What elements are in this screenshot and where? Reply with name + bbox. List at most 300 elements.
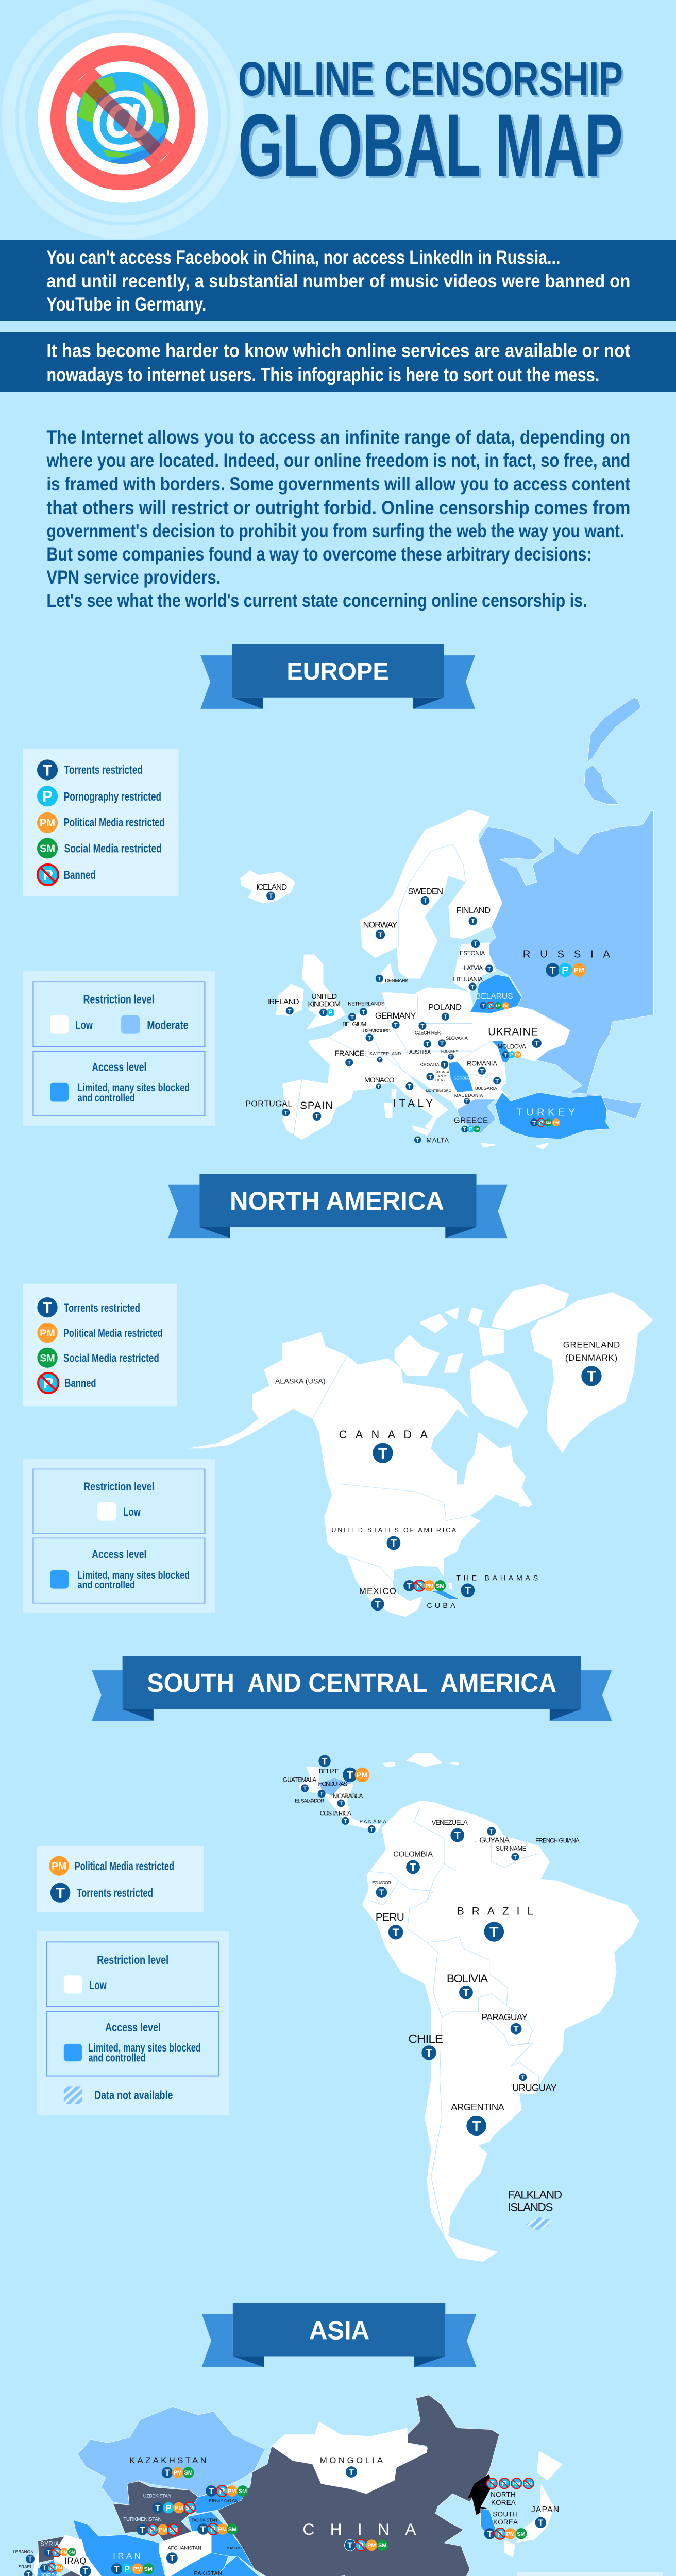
Tajikistan: PM	[218, 2527, 227, 2533]
Luxembourg: T	[368, 1035, 371, 1041]
Ireland	[267, 997, 299, 1014]
Cuba: CUBA	[427, 1602, 455, 1610]
Turkey	[516, 1107, 575, 1126]
legend item: social media: SM	[40, 843, 55, 855]
title	[238, 52, 626, 197]
Uzbekistan	[143, 2494, 195, 2513]
access level box: and controlled	[78, 1580, 135, 1591]
Turkmenistan: PM	[159, 2527, 167, 2533]
Slovakia	[438, 1036, 468, 1047]
Greece	[454, 1116, 488, 1132]
Ecuador: T	[379, 1888, 384, 1897]
restriction level box: Low	[75, 1018, 93, 1031]
Hungary: HUNGARY	[441, 1050, 458, 1054]
Iceland: ICELAND	[256, 883, 287, 892]
Japan	[531, 2505, 559, 2528]
Ecuador: ECUADOR	[372, 1880, 391, 1885]
ribbon heading: Asia: ASIA	[309, 2316, 369, 2345]
Belgium: BELGIUM	[342, 1021, 366, 1028]
Iraq: IRAQ	[65, 2556, 86, 2566]
The Bahamas: THE BAHAMAS	[456, 1574, 538, 1583]
access level box: Access level	[92, 1548, 146, 1561]
Bolivia: T	[463, 1988, 469, 1999]
access level box: and controlled	[78, 1092, 135, 1104]
legend item: banned: P	[43, 867, 53, 884]
Mexico: MEXICO	[359, 1586, 396, 1596]
Russia: T	[550, 965, 556, 976]
Belarus: SM	[495, 1004, 501, 1008]
ribbon heading: North America: NORTH AMERICA	[230, 1187, 444, 1215]
Luxembourg: LUXEMBOURG	[360, 1028, 391, 1033]
Sweden: T	[423, 897, 427, 905]
Falkland Islands	[508, 2189, 562, 2213]
Paraguay: PARAGUAY	[482, 2012, 528, 2022]
legend item: banned: P	[43, 1375, 54, 1392]
Iran: T	[114, 2565, 120, 2574]
section: South and Central America	[37, 1656, 639, 2262]
access level box: Limited, many sites blocked	[89, 2041, 201, 2054]
Lebanon: LEBANON	[13, 2549, 33, 2554]
Ukraine: T	[534, 1040, 539, 1047]
Cuba: T	[407, 1582, 412, 1591]
Tajikistan: TADJIKISTAN	[191, 2517, 217, 2522]
The Bahamas	[456, 1574, 538, 1597]
Colombia: COLOMBIA	[393, 1850, 433, 1858]
France: FRANCE	[334, 1049, 365, 1058]
Lithuania	[453, 976, 483, 990]
Japan: T	[538, 2518, 543, 2528]
South America legend: icons	[37, 1846, 204, 1912]
Poland: T	[444, 1014, 447, 1020]
access level box	[46, 2011, 218, 2076]
Kazakhstan: T	[165, 2468, 170, 2478]
Spain	[300, 1100, 333, 1121]
Honduras: HONDURAS	[318, 1781, 348, 1787]
restriction level box: Low	[123, 1505, 141, 1518]
restriction level box: Restriction level	[97, 1953, 168, 1967]
legend item: political media: Political Media restricted	[64, 816, 165, 829]
South Korea: T	[487, 2530, 493, 2539]
Bulgaria	[475, 1077, 501, 1091]
North Korea: PM	[513, 2481, 520, 2487]
Uzbekistan: T	[155, 2503, 160, 2513]
Colombia: T	[410, 1862, 416, 1873]
Moldova: PM	[515, 1053, 520, 1057]
Turkey: P	[539, 1120, 543, 1126]
ribbon heading: Europe: EUROPE	[286, 658, 389, 685]
Afghanistan: AFGHANISTAN	[167, 2546, 201, 2551]
Turkey: SM	[546, 1120, 551, 1125]
Tajikistan: SM	[228, 2527, 236, 2533]
Croatia	[420, 1061, 448, 1069]
Ukraine: UKRAINE	[488, 1026, 538, 1038]
Iran: PM	[133, 2566, 142, 2572]
China: P	[358, 2541, 364, 2550]
Paraguay: T	[514, 2025, 519, 2034]
Kyrgyzstan: P	[219, 2487, 225, 2496]
Panama: T	[370, 1827, 374, 1833]
Netherlands	[348, 1002, 385, 1015]
El Salvador	[295, 1790, 326, 1804]
legend item: political media: PM	[40, 818, 55, 829]
legend item: pornography: Pornography restricted	[64, 790, 161, 803]
intro body text: VPN service providers.	[46, 567, 221, 588]
Finland	[456, 905, 491, 925]
legend item: torrents: Torrents restricted	[64, 1301, 140, 1314]
intro body text	[46, 427, 630, 611]
France	[334, 1049, 365, 1066]
Romania: ROMANIA	[467, 1060, 497, 1067]
Czech Republic: T	[421, 1023, 425, 1029]
Mexico: T	[375, 1599, 381, 1609]
legend item: pornography: P	[42, 788, 53, 805]
South Korea: P	[497, 2530, 503, 2539]
Spain: T	[315, 1113, 319, 1120]
China	[302, 2520, 416, 2551]
Moldova	[498, 1043, 526, 1058]
Kazakhstan: SM	[184, 2470, 193, 2476]
Greece: GREECE	[454, 1116, 488, 1125]
legend item: banned: Banned	[64, 868, 96, 882]
Portugal: PORTUGAL	[245, 1099, 292, 1108]
legend item: torrents: T	[43, 762, 53, 779]
access level box	[33, 1052, 205, 1116]
legend item: banned	[38, 865, 96, 885]
Alaska: ALASKA (USA)	[275, 1378, 326, 1386]
Bosnia and Herzegovina	[426, 1071, 449, 1082]
Kazakhstan: KAZAKHSTAN	[129, 2455, 207, 2465]
North America legend: levels	[23, 1459, 215, 1613]
restriction level box	[33, 1469, 205, 1534]
Jordan: T	[42, 2565, 46, 2572]
Italy	[393, 1082, 433, 1110]
legend item: banned	[38, 1373, 96, 1393]
Tajikistan	[191, 2517, 238, 2535]
Russia: RUSSIA	[523, 949, 611, 960]
Cuba: P	[417, 1582, 422, 1591]
legend item: torrents: Torrents restricted	[64, 763, 143, 776]
access level box: Limited, many sites blocked	[78, 1082, 190, 1094]
Malta: MALTA	[426, 1137, 449, 1144]
data not available	[64, 2086, 173, 2104]
Greenland: (DENMARK)	[565, 1353, 617, 1363]
Cuba	[403, 1580, 455, 1610]
Cuba: SM	[436, 1583, 444, 1589]
data not available: Data not available	[94, 2089, 173, 2102]
Croatia: CROATIA	[420, 1062, 440, 1067]
map: Europe	[240, 698, 653, 1149]
Russia: PM	[574, 967, 584, 974]
Asia legend: icons	[517, 2572, 663, 2576]
North Korea	[487, 2478, 534, 2506]
United Kingdom	[308, 992, 341, 1016]
Venezuela	[432, 1819, 468, 1842]
legend item: political media: Political Media restricted	[63, 1327, 162, 1340]
United Kingdom: UNITED	[311, 992, 337, 1001]
Macedonia: MACEDONIA	[454, 1093, 483, 1098]
Poland	[428, 1002, 462, 1021]
Hungary	[441, 1050, 458, 1060]
United Kingdom: P	[329, 1010, 333, 1016]
legend item: political media	[49, 1856, 174, 1876]
section: Asia	[13, 2303, 663, 2576]
China: PM	[367, 2543, 376, 2549]
Netherlands: T	[362, 1009, 365, 1015]
legend item: torrents: T	[56, 1885, 65, 1902]
Guyana: T	[489, 1828, 494, 1835]
Falkland Islands: ISLANDS	[508, 2200, 553, 2213]
Spain: SPAIN	[300, 1100, 333, 1112]
Slovakia: T	[440, 1041, 444, 1047]
Lebanon	[13, 2549, 35, 2563]
Bosnia and Herzegovina: AND	[437, 1075, 446, 1078]
Canada	[339, 1428, 428, 1463]
North America legend: icons	[23, 1284, 177, 1406]
Greenland: T	[587, 1368, 596, 1385]
Czech Republic: CZECH REP.	[415, 1030, 441, 1035]
Ireland: T	[288, 1008, 292, 1014]
Peru: PERU	[376, 1911, 404, 1923]
Argentina	[451, 2102, 505, 2136]
Greece: SM	[474, 1128, 480, 1131]
Austria	[409, 1040, 431, 1055]
Honduras	[318, 1768, 369, 1787]
Guyana: GUYANA	[479, 1836, 510, 1845]
Iran: IRAN	[113, 2551, 141, 2561]
intro band 1: You can't access Facebook in China, nor access LinkedIn in Russia...	[46, 247, 560, 268]
Austria: AUSTRIA	[409, 1049, 431, 1055]
Monaco: MONACO	[364, 1076, 395, 1084]
Sweden	[408, 886, 443, 905]
Germany: GERMANY	[375, 1011, 416, 1021]
Guyana	[479, 1827, 510, 1845]
Denmark: DENMARK	[385, 978, 409, 984]
Syria: PM	[61, 2550, 67, 2555]
Switzerland: T	[379, 1058, 381, 1062]
restriction level box: Restriction level	[83, 993, 155, 1006]
South Korea	[484, 2511, 527, 2539]
French Guiana: FRENCH GUIANA	[535, 1838, 580, 1844]
Mongolia	[320, 2455, 383, 2478]
Kyrgyzstan: T	[209, 2487, 214, 2496]
Honduras: T	[347, 1769, 353, 1782]
Iran: P	[124, 2565, 130, 2574]
El Salvador: EL SALVADOR	[295, 1798, 324, 1804]
Belarus	[476, 992, 513, 1009]
Japan: JAPAN	[531, 2505, 559, 2514]
Norway: NORWAY	[363, 920, 397, 929]
section: North America	[23, 1174, 653, 1617]
Germany: T	[394, 1022, 398, 1028]
Austria: T	[426, 1041, 429, 1047]
Peru	[376, 1911, 404, 1939]
Norway	[363, 920, 397, 939]
decorative header rings	[8, 4, 237, 232]
Ecuador	[372, 1880, 391, 1898]
Czech Republic	[415, 1022, 441, 1035]
United States	[331, 1527, 457, 1550]
Turkey: TURKEY	[516, 1107, 575, 1118]
Moldova: MOLDOVA	[498, 1043, 526, 1050]
legend item: political media: PM	[40, 1328, 55, 1339]
intro band 1: YouTube in Germany.	[46, 294, 206, 315]
Uruguay	[512, 2073, 557, 2093]
Macedonia: T	[465, 1098, 468, 1104]
legend item: social media	[37, 1348, 159, 1368]
Honduras: PM	[357, 1771, 367, 1780]
Estonia: ESTONIA	[460, 950, 485, 957]
North Korea: P	[502, 2480, 507, 2488]
Netherlands: NETHERLANDS	[348, 1002, 385, 1007]
icon: banned internet globe: @	[90, 78, 156, 154]
North Korea: NORTH	[491, 2490, 516, 2498]
legend item: torrents: Torrents restricted	[77, 1886, 153, 1900]
intro band 2	[0, 332, 676, 392]
Uruguay: T	[521, 2075, 525, 2081]
Luxembourg	[360, 1028, 391, 1042]
Uzbekistan: P	[166, 2503, 172, 2513]
Europe legend: levels	[23, 971, 215, 1126]
legend item: political media	[37, 1323, 162, 1343]
France: T	[347, 1060, 351, 1066]
legend item: torrents	[37, 1297, 140, 1317]
South Korea: SOUTH	[493, 2511, 518, 2518]
Greece: P	[469, 1127, 472, 1132]
Lebanon: T	[28, 2556, 32, 2563]
Argentina: T	[472, 2118, 481, 2134]
Uzbekistan: PM	[175, 2505, 183, 2511]
North Korea: SM	[525, 2481, 532, 2487]
Finland: FINLAND	[456, 905, 491, 915]
Lithuania: T	[471, 984, 475, 990]
map: Asia	[33, 2395, 581, 2576]
United States: UNITED STATES OF AMERICA	[331, 1527, 457, 1534]
Colombia	[393, 1850, 433, 1874]
Panama	[360, 1819, 387, 1833]
section: Europe	[23, 644, 653, 1149]
Belize: BELIZE	[319, 1768, 339, 1775]
Belize: T	[322, 1756, 328, 1766]
Iran: SM	[144, 2566, 153, 2572]
Malta: T	[416, 1138, 420, 1143]
Moldova: P	[510, 1052, 514, 1058]
Kazakhstan	[129, 2455, 207, 2478]
Panama: PANAMA	[360, 1819, 387, 1824]
Nicaragua	[333, 1793, 363, 1807]
Bolivia: BOLIVIA	[447, 1972, 488, 1985]
Bulgaria: T	[495, 1078, 499, 1084]
legend item: torrents	[50, 1883, 153, 1903]
Macedonia	[454, 1093, 483, 1104]
legend item: banned: Banned	[65, 1377, 96, 1389]
Denmark	[376, 975, 409, 984]
Israel: ISRAEL	[17, 2564, 32, 2569]
United Kingdom: T	[322, 1010, 325, 1016]
Norway: T	[378, 931, 383, 939]
access level box: and controlled	[89, 2051, 146, 2064]
Sweden: SWEDEN	[408, 886, 443, 896]
Iraq	[65, 2556, 91, 2576]
Turkmenistan: P	[150, 2526, 156, 2535]
legend item: social media: Social Media restricted	[63, 1352, 159, 1365]
Chile: CHILE	[408, 2032, 443, 2046]
Brazil	[457, 1906, 533, 1942]
Jordan	[40, 2564, 63, 2576]
Romania: T	[480, 1068, 484, 1074]
Greenland: GREENLAND	[563, 1340, 620, 1349]
Switzerland: SWITZERLAND	[369, 1051, 401, 1056]
Jordan: P	[49, 2565, 54, 2572]
Turkmenistan: SM	[169, 2527, 177, 2533]
Latvia: T	[487, 966, 491, 972]
ribbon heading: Europe	[200, 644, 475, 709]
Monaco: T	[377, 1084, 380, 1089]
Brazil: BRAZIL	[457, 1906, 533, 1918]
Turkey: PM	[553, 1120, 559, 1125]
Europe legend: icons	[23, 749, 178, 896]
map: North America	[188, 1284, 653, 1617]
Jordan: PM	[56, 2565, 62, 2570]
Belarus: P	[489, 1003, 493, 1009]
Denmark: T	[378, 976, 381, 982]
restriction level box	[46, 1942, 218, 2007]
Peru: T	[393, 1926, 399, 1939]
legend item: political media: Political Media restricted	[75, 1859, 174, 1873]
Italy: ITALY	[393, 1098, 433, 1110]
China: T	[347, 2541, 352, 2550]
Turkmenistan: T	[140, 2526, 145, 2535]
South Korea: KOREA	[493, 2518, 518, 2526]
Suriname	[496, 1845, 527, 1861]
Syria	[40, 2540, 76, 2557]
Russia	[523, 949, 611, 977]
legend item: social media	[37, 838, 162, 858]
Costa Rica: COSTA RICA	[320, 1810, 351, 1817]
Switzerland	[369, 1051, 401, 1062]
Suriname: SURINAME	[496, 1845, 527, 1852]
Belgium: T	[350, 1014, 354, 1021]
Slovakia: SLOVAKIA	[446, 1036, 468, 1041]
Russia: P	[562, 965, 569, 976]
Venezuela: VENEZUELA	[432, 1819, 468, 1826]
Tajikistan: P	[210, 2525, 216, 2534]
Chile: T	[426, 2047, 432, 2059]
Guatemala	[283, 1777, 316, 1792]
map: South and Central America	[300, 1753, 639, 2262]
Hungary: T	[450, 1054, 453, 1059]
legend item: political media	[37, 812, 165, 833]
South Korea: PM	[506, 2531, 515, 2537]
Kazakhstan: PM	[174, 2470, 182, 2476]
Argentina: ARGENTINA	[451, 2102, 505, 2112]
Bosnia and Herzegovina: T	[429, 1074, 432, 1080]
Nicaragua: T	[339, 1801, 343, 1807]
Costa Rica	[320, 1810, 351, 1825]
Uzbekistan: SM	[185, 2505, 194, 2511]
Kyrgyzstan: PM	[228, 2488, 236, 2495]
Kyrgyzstan	[206, 2485, 248, 2503]
Lithuania: LITHUANIA	[453, 976, 483, 983]
ribbon heading: North America	[168, 1174, 508, 1238]
Nicaragua: NICARAGUA	[333, 1793, 363, 1800]
intro band 1	[0, 240, 676, 321]
Belarus: PM	[503, 1004, 509, 1008]
South Korea: SM	[517, 2531, 526, 2537]
Bosnia and Herzegovina: HERZ.	[435, 1079, 447, 1082]
Uruguay: URUGUAY	[512, 2082, 557, 2093]
restriction level box: Moderate	[147, 1018, 189, 1031]
Belarus: T	[482, 1003, 485, 1009]
